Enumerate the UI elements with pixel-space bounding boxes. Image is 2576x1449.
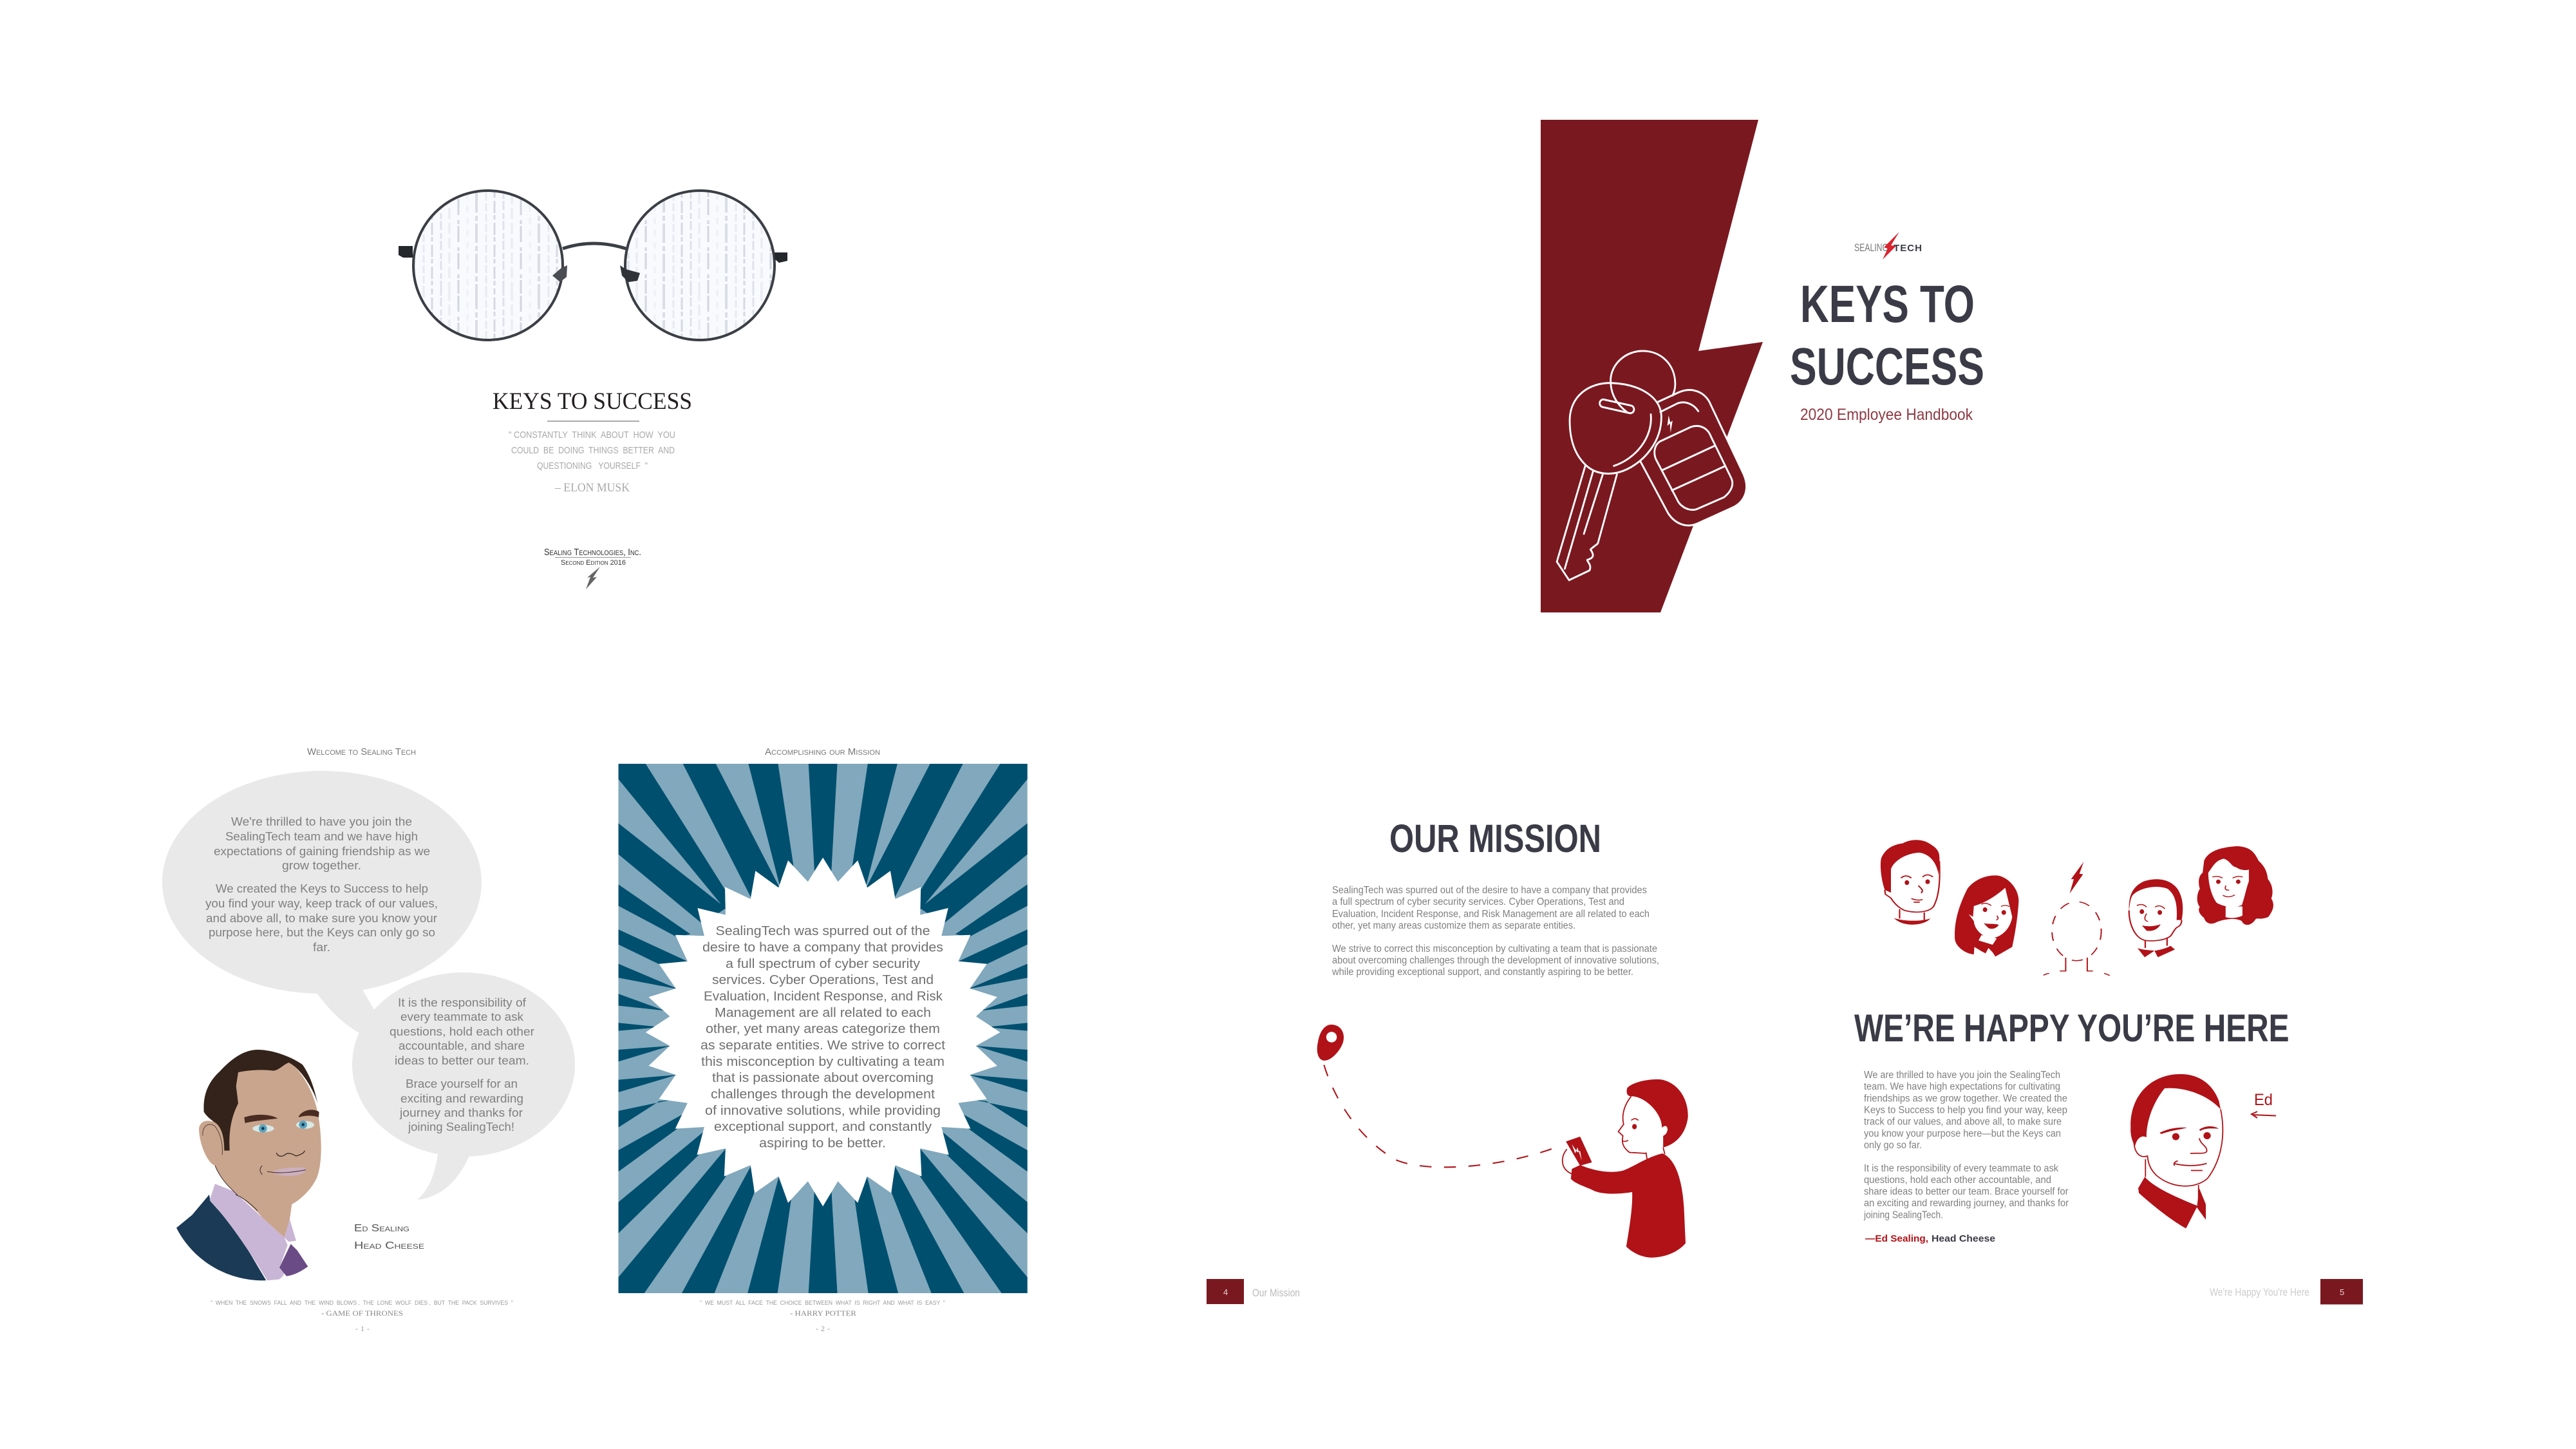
page quote: - 1 - xyxy=(355,1324,370,1333)
face: woman with straight hair xyxy=(1955,875,2018,956)
body text: you know your purpose here—but the Keys can xyxy=(1864,1128,2061,1139)
quote: COULD BE DOING THINGS BETTER AND xyxy=(511,446,675,456)
body text: about overcoming challenges through the development of innovative solutions, xyxy=(1332,955,1659,966)
logo: SealingTech: TECH xyxy=(1894,243,1922,254)
sunburst background xyxy=(618,764,1028,1293)
logo: SealingTech xyxy=(1854,232,1922,260)
speech bubble: welcome message: We're thrilled to have you join the xyxy=(231,815,412,828)
icon: round glasses xyxy=(399,191,787,340)
page number tab: 5 xyxy=(2340,1287,2344,1297)
mission text: a full spectrum of cyber security xyxy=(726,956,921,971)
speech bubble: responsibility message: joining SealingTech! xyxy=(408,1120,514,1133)
page quote: - HARRY POTTER xyxy=(790,1309,856,1318)
quote attribution: – ELON MUSK xyxy=(554,481,630,495)
mission text: other, yet many areas categorize them xyxy=(706,1021,940,1036)
publisher text xyxy=(544,547,641,567)
body text: team. We have high expectations for cultivating xyxy=(1864,1081,2060,1092)
speech bubble: welcome message xyxy=(162,771,482,1037)
body text: We are thrilled to have you join the SealingTech xyxy=(1864,1070,2060,1081)
name caption: Head Cheese xyxy=(354,1240,424,1251)
publisher text: Second Edition 2016 xyxy=(561,559,626,567)
body text xyxy=(1331,885,1659,978)
speech bubble: responsibility message: It is the responsibility of xyxy=(398,996,527,1009)
speech bubble: responsibility message: every teammate to ask xyxy=(400,1010,524,1023)
body text: questions, hold each other accountable, and xyxy=(1864,1175,2051,1186)
arrow xyxy=(2252,1112,2276,1118)
page quote: - 2 - xyxy=(816,1324,830,1333)
speech bubble: responsibility message: exciting and rewarding xyxy=(400,1092,523,1105)
mission text: Management are all related to each xyxy=(715,1005,931,1020)
quote: QUESTIONING YOURSELF " xyxy=(537,461,648,471)
Ed label: Ed xyxy=(2254,1091,2273,1109)
name caption: Ed Sealing xyxy=(354,1223,409,1234)
page quote xyxy=(211,1300,513,1333)
mission text: exceptional support, and constantly xyxy=(714,1119,932,1134)
speech bubble: responsibility message: accountable, and share xyxy=(399,1039,525,1052)
subtitle: 2020 Employee Handbook xyxy=(1800,406,1973,424)
mission text: as separate entities. We strive to correct xyxy=(700,1038,945,1052)
icon: map pin and dashed route xyxy=(1317,1025,1560,1167)
quote: " CONSTANTLY THINK ABOUT HOW YOU xyxy=(509,430,675,440)
speech bubble: welcome message: grow together. xyxy=(282,858,361,872)
face: dashed placeholder for new hire xyxy=(2044,902,2110,976)
body text xyxy=(1863,1070,2069,1221)
speech bubble: responsibility message: Brace yourself for an xyxy=(406,1077,518,1090)
heading: OUR MISSION xyxy=(1389,817,1601,860)
panel: red cover xyxy=(1541,120,1984,612)
title: KEYS TO SUCCESS xyxy=(493,388,692,415)
mission text: SealingTech was spurred out of the xyxy=(716,923,930,938)
heading: WE’RE HAPPY YOU’RE HERE xyxy=(1854,1007,2289,1050)
speech bubble: welcome message: you find your way, keep track of our values, xyxy=(205,896,438,910)
mission text: of innovative solutions, while providing xyxy=(705,1103,941,1118)
illustration: person holding phone xyxy=(1563,1079,1688,1258)
face: woman with curly hair xyxy=(2197,846,2273,925)
mission text: aspiring to be better. xyxy=(759,1136,886,1150)
panel: happy you're here page xyxy=(1854,840,2363,1305)
page number tab: 4 xyxy=(1223,1287,1228,1297)
mission text xyxy=(700,923,945,1150)
body text: a full spectrum of cyber security services. Cyber Operations, Test and xyxy=(1332,896,1624,907)
body text: joining SealingTech. xyxy=(1863,1209,1943,1221)
panel: serif cover xyxy=(399,191,787,589)
face: man xyxy=(1881,840,1940,925)
body text: Evaluation, Incident Response, and Risk Management are all related to each xyxy=(1332,909,1650,920)
mission text: challenges through the development xyxy=(711,1087,935,1101)
speech bubble: responsibility message: questions, hold each other xyxy=(390,1025,534,1038)
page number tab xyxy=(1207,1279,1244,1304)
speech bubble: welcome message: far. xyxy=(313,940,330,954)
panel: mission sunburst page xyxy=(618,746,1028,1333)
mission text: that is passionate about overcoming xyxy=(712,1070,934,1085)
mission text: desire to have a company that provides xyxy=(702,940,943,954)
speech bubble: welcome message: and above all, to make sure you know your xyxy=(206,911,437,925)
illustration: team faces xyxy=(1881,840,2273,976)
body text: share ideas to better our team. Brace yourself for xyxy=(1864,1186,2068,1197)
body text: only go so far. xyxy=(1864,1140,1922,1151)
footer label: Our Mission xyxy=(1252,1287,1300,1299)
icon: bolt xyxy=(2069,862,2083,894)
heading xyxy=(1790,275,1984,396)
mission text: this misconception by cultivating a team xyxy=(701,1054,945,1069)
speech bubble: responsibility message: ideas to better our team. xyxy=(395,1054,529,1067)
speech bubble: welcome message: SealingTech team and we have high xyxy=(225,829,418,843)
body text: We strive to correct this misconception by cultivating a team that is passionate xyxy=(1332,943,1657,954)
panel: welcome page xyxy=(162,746,575,1333)
name caption xyxy=(354,1223,424,1251)
page header: Welcome to Sealing Tech xyxy=(307,746,416,757)
page quote xyxy=(700,1300,945,1333)
body text: SealingTech was spurred out of the desire to have a company that provides xyxy=(1332,885,1647,896)
speech bubble: responsibility message xyxy=(352,972,575,1200)
quote xyxy=(509,430,675,471)
heading: KEYS TO xyxy=(1800,275,1975,334)
page header: Accomplishing our Mission xyxy=(765,746,880,757)
body text: other, yet many areas customize them as separate entities. xyxy=(1332,920,1575,931)
speech bubble: welcome message: purpose here, but the Keys can only go so xyxy=(209,925,435,939)
signature: Head Cheese xyxy=(1932,1233,1995,1244)
body text: friendships as we grow together. We created the xyxy=(1864,1094,2067,1104)
signature xyxy=(1865,1233,1995,1244)
footer label: We're Happy You're Here xyxy=(2210,1286,2309,1298)
body text: track of our values, and above all, to make sure xyxy=(1864,1117,2062,1127)
speech bubble: welcome message: We created the Keys to Success to help xyxy=(216,882,428,895)
page number tab xyxy=(2320,1279,2363,1305)
body text: Keys to Success to help you find your way, keep xyxy=(1864,1105,2067,1115)
heading: SUCCESS xyxy=(1790,337,1984,396)
face: man with bow tie xyxy=(2129,879,2183,957)
page quote: - GAME OF THRONES xyxy=(321,1309,403,1318)
logo: SealingTech: SEALING xyxy=(1854,242,1888,254)
mission text: services. Cyber Operations, Test and xyxy=(712,972,934,987)
icon: small bolt xyxy=(586,567,600,589)
body text: an exciting and rewarding journey, and thanks for xyxy=(1864,1198,2069,1209)
panel: our mission page xyxy=(1207,817,1688,1304)
publisher text: Sealing Technologies, Inc. xyxy=(544,547,641,558)
red bolt shape xyxy=(1541,120,1763,612)
speech bubble: welcome message: expectations of gaining friendship as we xyxy=(214,844,430,858)
signature: —Ed Sealing, xyxy=(1865,1233,1928,1244)
mission text: Evaluation, Incident Response, and Risk xyxy=(704,989,943,1003)
body text: while providing exceptional support, and constantly aspiring to be better. xyxy=(1331,967,1633,978)
portrait: Ed Sealing xyxy=(176,1050,321,1280)
page quote: " WHEN THE SNOWS FALL AND THE WIND BLOWS , THE LONE WOLF DIES , BUT THE PACK SURVIVES " xyxy=(211,1300,513,1306)
page quote: " WE MUST ALL FACE THE CHOICE BETWEEN WHAT IS RIGHT AND WHAT IS EASY " xyxy=(700,1300,945,1306)
speech bubble: responsibility message: journey and thanks for xyxy=(399,1106,523,1119)
icon: car keys xyxy=(1557,351,1746,580)
illustration: Ed portrait xyxy=(2130,1074,2223,1229)
body text: It is the responsibility of every teammate to ask xyxy=(1864,1163,2058,1174)
